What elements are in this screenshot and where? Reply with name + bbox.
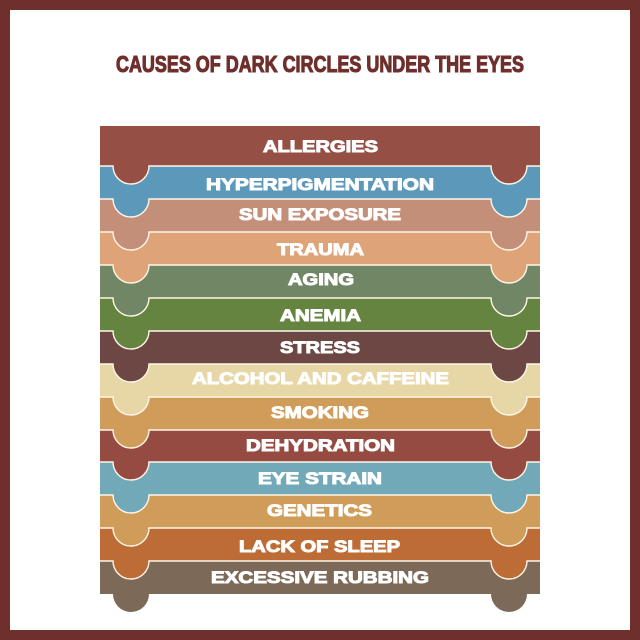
band: excessive rubbing	[100, 561, 540, 612]
band: dehydration	[100, 430, 540, 480]
band: eye strain	[100, 462, 540, 513]
band: anemia: ANEMIA	[280, 306, 361, 325]
band: stress: STRESS	[280, 338, 360, 357]
band: aging: AGING	[288, 270, 354, 289]
band: eye strain: EYE STRAIN	[258, 469, 382, 488]
band: genetics	[100, 495, 540, 546]
band: trauma: TRAUMA	[277, 240, 364, 259]
band: smoking: SMOKING	[271, 403, 369, 422]
band: sun exposure	[100, 199, 540, 250]
band: excessive rubbing: EXCESSIVE RUBBING	[211, 568, 429, 587]
band: allergies: ALLERGIES	[263, 137, 378, 156]
band: lack of sleep: LACK OF SLEEP	[239, 537, 400, 556]
band: stress	[100, 331, 540, 382]
band: trauma	[100, 232, 540, 283]
band: aging	[100, 265, 540, 316]
stacked causes list	[100, 126, 540, 612]
title: CAUSES OF DARK CIRCLES UNDER THE EYES	[116, 51, 524, 77]
band: dehydration: DEHYDRATION	[246, 436, 395, 455]
band: alcohol and caffeine	[100, 364, 540, 415]
band: lack of sleep	[100, 528, 540, 579]
band: hyperpigmentation: HYPERPIGMENTATION	[206, 175, 434, 194]
band: genetics: GENETICS	[267, 501, 372, 520]
band: alcohol and caffeine: ALCOHOL AND CAFFEINE	[192, 369, 449, 388]
band: allergies	[100, 126, 540, 184]
band: smoking	[100, 397, 540, 448]
band: anemia	[100, 298, 540, 349]
band: sun exposure: SUN EXPOSURE	[239, 205, 401, 224]
band: hyperpigmentation	[100, 166, 540, 217]
